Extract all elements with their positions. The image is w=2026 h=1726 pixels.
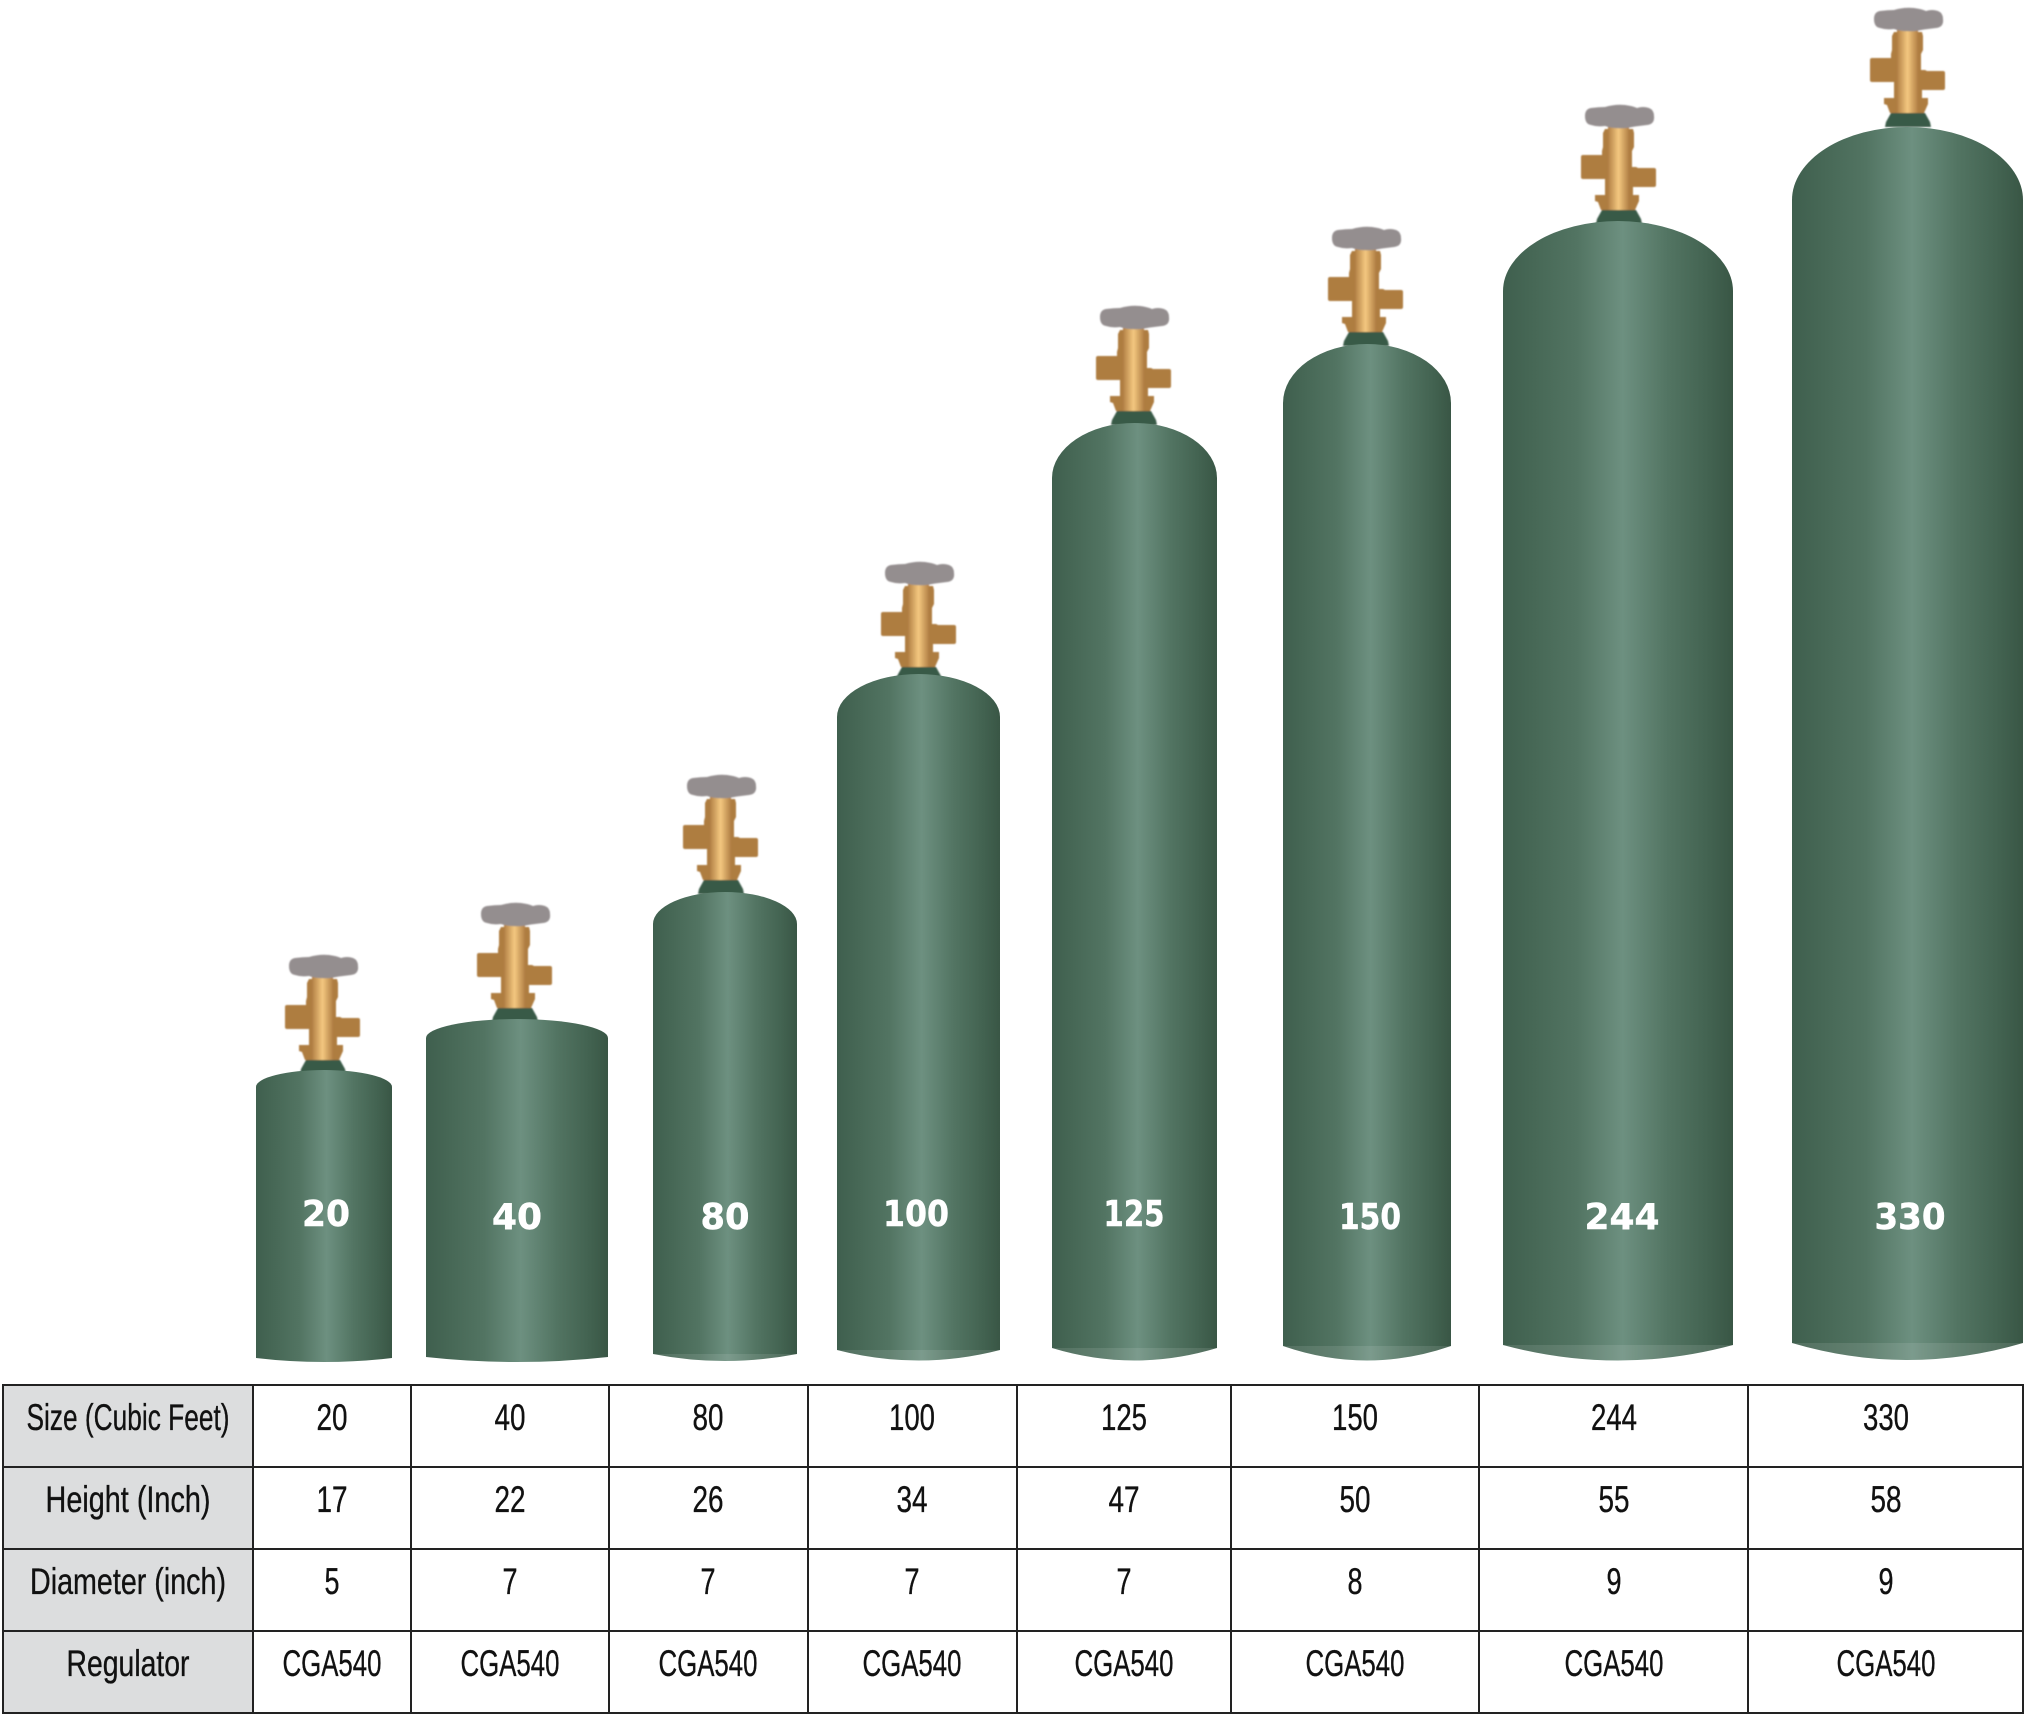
row: height: 22 (494, 1479, 526, 1520)
valve 125 (1096, 306, 1171, 425)
row: size: 125 (1101, 1397, 1147, 1438)
tank body 100 (837, 674, 1000, 1360)
valve 100 (881, 562, 956, 681)
row: height: 58 (1870, 1479, 1902, 1520)
row: diameter: 7 (1116, 1561, 1132, 1602)
row: size (26, 1397, 1909, 1438)
row: size: 80 (692, 1397, 724, 1438)
tank body 150 (1283, 344, 1451, 1360)
row: regulator: CGA540 (1836, 1643, 1936, 1684)
cylinder 100 (837, 562, 1000, 1360)
cylinder 125 (1052, 306, 1217, 1360)
bottom rim 80 (653, 1354, 797, 1361)
row: regulator: CGA540 (282, 1643, 382, 1684)
valve 40 (477, 903, 552, 1022)
row: size: 100 (889, 1397, 935, 1438)
capacity label 125: 125 (1104, 1194, 1164, 1235)
bottom rim 100 (837, 1350, 1000, 1360)
tank body 80 (653, 892, 797, 1361)
valve 20 (285, 955, 360, 1074)
row: size: 244 (1591, 1397, 1637, 1438)
bottom rim 244 (1503, 1345, 1733, 1360)
row: height: Height (Inch) (46, 1479, 210, 1520)
cylinder 80 (653, 775, 797, 1361)
capacity label 100: 100 (883, 1194, 949, 1235)
row: height: 47 (1108, 1479, 1140, 1520)
bottom rim 330 (1792, 1343, 2023, 1360)
row: regulator: CGA540 (658, 1643, 758, 1684)
row: diameter: 5 (324, 1561, 340, 1602)
specification table (3, 1385, 2023, 1713)
row: size: 40 (494, 1397, 526, 1438)
row: regulator (66, 1643, 1936, 1684)
row: regulator: CGA540 (1306, 1643, 1404, 1684)
row: diameter: 7 (502, 1561, 518, 1602)
valve 80 (683, 775, 758, 894)
capacity label 80: 80 (700, 1197, 750, 1238)
row: diameter: 9 (1606, 1561, 1622, 1602)
tank body 40 (426, 1019, 608, 1362)
capacity label 20: 20 (302, 1194, 350, 1235)
cylinder 20 (256, 955, 392, 1362)
row: height: 17 (316, 1479, 348, 1520)
capacity label 330: 330 (1874, 1197, 1946, 1238)
bottom rim 150 (1283, 1346, 1451, 1360)
row: diameter (30, 1561, 1894, 1602)
row: size: 150 (1332, 1397, 1378, 1438)
cylinder 150 (1283, 227, 1451, 1360)
row: regulator: CGA540 (460, 1643, 560, 1684)
row: size: 330 (1863, 1397, 1909, 1438)
cylinder 330 (1792, 8, 2023, 1360)
header column background (3, 1385, 253, 1713)
valve 244 (1581, 105, 1656, 224)
row: regulator: CGA540 (1074, 1643, 1174, 1684)
row: diameter: Diameter (inch) (30, 1561, 226, 1602)
tank body 20 (256, 1070, 392, 1362)
tank body 244 (1503, 221, 1733, 1360)
row: diameter: 8 (1348, 1561, 1362, 1602)
capacity label 40: 40 (492, 1197, 542, 1238)
row: regulator: Regulator (66, 1643, 190, 1684)
row: height: 50 (1340, 1479, 1370, 1520)
row: regulator: CGA540 (1564, 1643, 1664, 1684)
tank body 330 (1792, 127, 2023, 1360)
valve 330 (1870, 8, 1945, 127)
row: diameter: 7 (700, 1561, 716, 1602)
row: size: Size (Cubic Feet) (26, 1397, 230, 1438)
row: size: 20 (316, 1397, 348, 1438)
row: height (46, 1479, 1902, 1520)
valve 150 (1328, 227, 1403, 346)
row: diameter: 9 (1878, 1561, 1894, 1602)
row: height: 26 (692, 1479, 724, 1520)
row: height: 55 (1598, 1479, 1630, 1520)
bottom rim 125 (1052, 1348, 1217, 1360)
tank body 125 (1052, 423, 1217, 1360)
cylinder 40 (426, 903, 608, 1362)
cylinder 244 (1503, 105, 1733, 1360)
row: height: 34 (896, 1479, 928, 1520)
row: regulator: CGA540 (862, 1643, 962, 1684)
capacity label 244: 244 (1584, 1197, 1660, 1238)
table grid (3, 1385, 2023, 1713)
row: diameter: 7 (904, 1561, 920, 1602)
capacity label 150: 150 (1339, 1197, 1401, 1238)
